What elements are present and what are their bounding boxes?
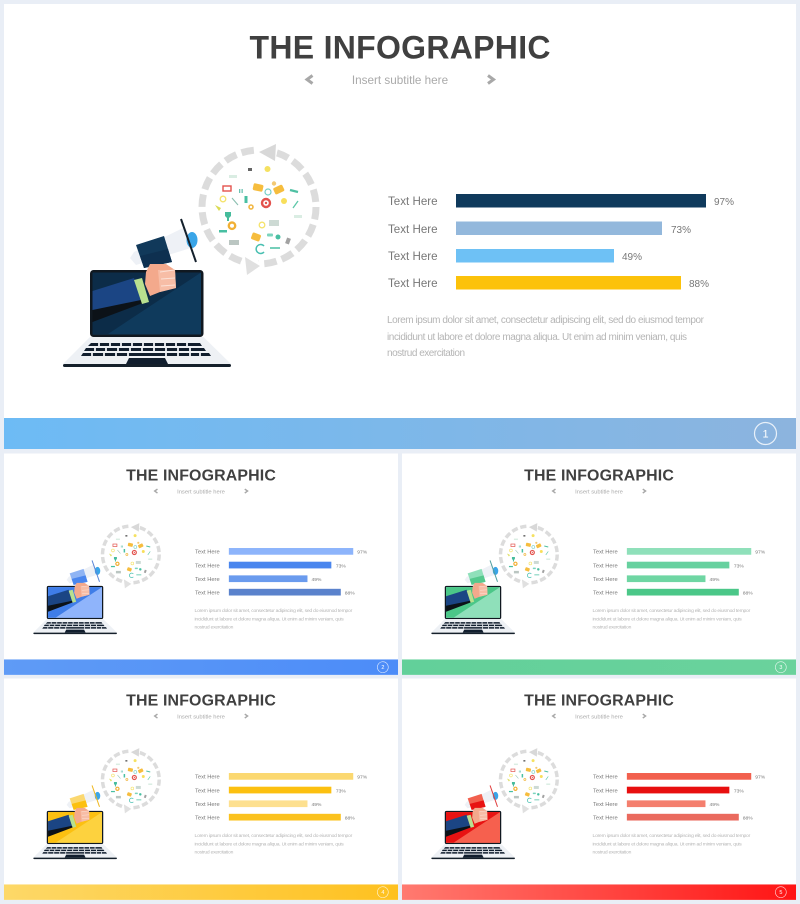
title: THE INFOGRAPHIC — [524, 693, 674, 710]
illustration: laptop with megaphone — [63, 142, 316, 367]
page number: 2 — [381, 665, 384, 671]
bar row 1: Text Here — [593, 549, 618, 555]
page number: 4 — [381, 890, 384, 896]
icon: left chevron — [553, 714, 555, 718]
panel: slide 2 (blue) — [4, 453, 398, 675]
title: THE INFOGRAPHIC — [126, 468, 276, 485]
bar chart — [195, 548, 368, 596]
illustration: laptop with megaphone — [33, 747, 159, 859]
illustration: laptop with megaphone — [431, 747, 557, 859]
bar row 3 — [593, 800, 720, 808]
body text: Lorem ipsum dolor sit amet, consectetur adipiscing elit, sed do eiusmod tempor — [593, 608, 751, 614]
bar row 4: 88% — [345, 590, 355, 596]
bar row 4: 88% — [743, 590, 753, 596]
bar row 2 — [388, 222, 691, 236]
bar row 2: Text Here — [593, 563, 618, 569]
bar row 3: Text Here — [593, 802, 618, 808]
body text: incididunt ut labore et dolore magna aliqua. Ut enim ad minim veniam, quis — [195, 617, 344, 623]
bar row 4: Text Here — [195, 815, 220, 821]
title: THE INFOGRAPHIC — [126, 693, 276, 710]
bar row 1: 97% — [755, 549, 766, 555]
bar row 4: Text Here — [593, 590, 618, 596]
illustration: laptop with megaphone — [33, 522, 159, 634]
icon: left chevron — [155, 714, 157, 718]
icon: right chevron — [245, 489, 248, 493]
body text: nostrud exercitation — [195, 850, 234, 856]
page number — [377, 662, 388, 673]
bar row 4 — [195, 814, 355, 821]
bar row 3 — [195, 800, 322, 808]
bar row 3 — [388, 249, 642, 263]
icon: left chevron — [155, 489, 157, 493]
bar row 3: Text Here — [195, 802, 220, 808]
bar row 1: Text Here — [388, 195, 438, 208]
body text: nostrud exercitation — [593, 625, 632, 631]
bar row 4: 88% — [743, 815, 753, 821]
footer bar — [4, 884, 398, 900]
bar row 2: 73% — [671, 225, 691, 236]
body text: incididunt ut labore et dolore magna aliqua. Ut enim ad minim veniam, quis — [387, 332, 687, 343]
footer bar — [402, 884, 796, 900]
body text: nostrud exercitation — [195, 625, 234, 631]
page number: 5 — [779, 890, 782, 896]
bar row 4: 88% — [689, 279, 709, 290]
icon: left chevron — [307, 76, 312, 84]
bar row 1 — [593, 548, 766, 555]
title: THE INFOGRAPHIC — [524, 468, 674, 485]
bar row 4 — [593, 589, 753, 596]
bar row 3: Text Here — [388, 250, 438, 263]
bar row 2: 73% — [336, 788, 346, 794]
body text: Lorem ipsum dolor sit amet, consectetur adipiscing elit, sed do eiusmod tempor — [195, 833, 353, 839]
bar chart — [593, 773, 766, 821]
title: THE INFOGRAPHIC — [250, 30, 550, 66]
subtitle: Insert subtitle here — [177, 714, 225, 720]
page number — [775, 887, 786, 898]
bar row 2 — [195, 562, 346, 569]
page number — [754, 422, 776, 444]
bar row 2: Text Here — [195, 788, 220, 794]
bar row 2: Text Here — [388, 223, 438, 236]
page number — [377, 887, 388, 898]
bar row 2: Text Here — [195, 563, 220, 569]
bar row 4: Text Here — [195, 590, 220, 596]
body text — [593, 608, 751, 631]
icon: right chevron — [643, 714, 646, 718]
footer bar — [4, 418, 796, 449]
bar row 1 — [195, 548, 368, 555]
body text: incididunt ut labore et dolore magna aliqua. Ut enim ad minim veniam, quis — [593, 842, 742, 848]
bar row 2 — [593, 562, 744, 569]
bar row 4: Text Here — [593, 815, 618, 821]
bar row 4 — [195, 589, 355, 596]
bar chart — [195, 773, 368, 821]
bar row 2: Text Here — [593, 788, 618, 794]
bar row 2: 73% — [734, 563, 744, 569]
body text — [387, 315, 705, 359]
bar row 4 — [388, 276, 709, 290]
body text: Lorem ipsum dolor sit amet, consectetur adipiscing elit, sed do eiusmod tempor — [593, 833, 751, 839]
subtitle: Insert subtitle here — [177, 489, 225, 495]
body text — [195, 833, 353, 856]
bar row 1: 97% — [357, 774, 368, 780]
page number — [775, 662, 786, 673]
subtitle: Insert subtitle here — [352, 74, 448, 87]
bar row 1 — [195, 773, 368, 780]
bar row 1 — [593, 773, 766, 780]
icon: right chevron — [643, 489, 646, 493]
bar row 3: 49% — [622, 252, 642, 263]
footer bar — [402, 659, 796, 675]
bar row 3: 49% — [311, 577, 322, 583]
bar row 1: Text Here — [593, 774, 618, 780]
page number: 1 — [762, 428, 769, 440]
body text: Lorem ipsum dolor sit amet, consectetur adipiscing elit, sed do eiusmod tempor — [387, 315, 705, 326]
icon: left chevron — [553, 489, 555, 493]
panel: slide 4 (yellow) — [4, 678, 398, 900]
panel: slide 5 (red) — [402, 678, 796, 900]
bar row 2 — [593, 787, 744, 794]
bar row 3 — [195, 575, 322, 583]
bar row 1: Text Here — [195, 549, 220, 555]
bar row 2 — [195, 787, 346, 794]
bar row 3: 49% — [709, 802, 720, 808]
bar row 4: 88% — [345, 815, 355, 821]
illustration: laptop with megaphone — [431, 522, 557, 634]
bar row 3 — [593, 575, 720, 583]
footer bar — [4, 659, 398, 675]
body text: incididunt ut labore et dolore magna aliqua. Ut enim ad minim veniam, quis — [593, 617, 742, 623]
icon: right chevron — [245, 714, 248, 718]
body text — [195, 608, 353, 631]
bar row 2: 73% — [336, 563, 346, 569]
bar row 1: Text Here — [195, 774, 220, 780]
body text — [593, 833, 751, 856]
bar row 1: 97% — [714, 197, 734, 208]
bar row 4 — [593, 814, 753, 821]
bar chart — [593, 548, 766, 596]
body text: Lorem ipsum dolor sit amet, consectetur adipiscing elit, sed do eiusmod tempor — [195, 608, 353, 614]
subtitle: Insert subtitle here — [575, 714, 623, 720]
bar row 1: 97% — [755, 774, 766, 780]
bar row 1 — [388, 194, 734, 208]
bar row 1: 97% — [357, 549, 368, 555]
bar chart — [388, 194, 734, 290]
page number: 3 — [779, 665, 782, 671]
icon: right chevron — [488, 76, 494, 84]
bar row 2: 73% — [734, 788, 744, 794]
body text: nostrud exercitation — [387, 348, 465, 359]
body text: nostrud exercitation — [593, 850, 632, 856]
bar row 3: 49% — [709, 577, 720, 583]
bar row 3: 49% — [311, 802, 322, 808]
bar row 3: Text Here — [195, 577, 220, 583]
panel: main slide (blue-navy) — [4, 4, 796, 449]
bar row 4: Text Here — [388, 277, 438, 290]
bar row 3: Text Here — [593, 577, 618, 583]
subtitle: Insert subtitle here — [575, 489, 623, 495]
body text: incididunt ut labore et dolore magna aliqua. Ut enim ad minim veniam, quis — [195, 842, 344, 848]
panel: slide 3 (green) — [402, 453, 796, 675]
